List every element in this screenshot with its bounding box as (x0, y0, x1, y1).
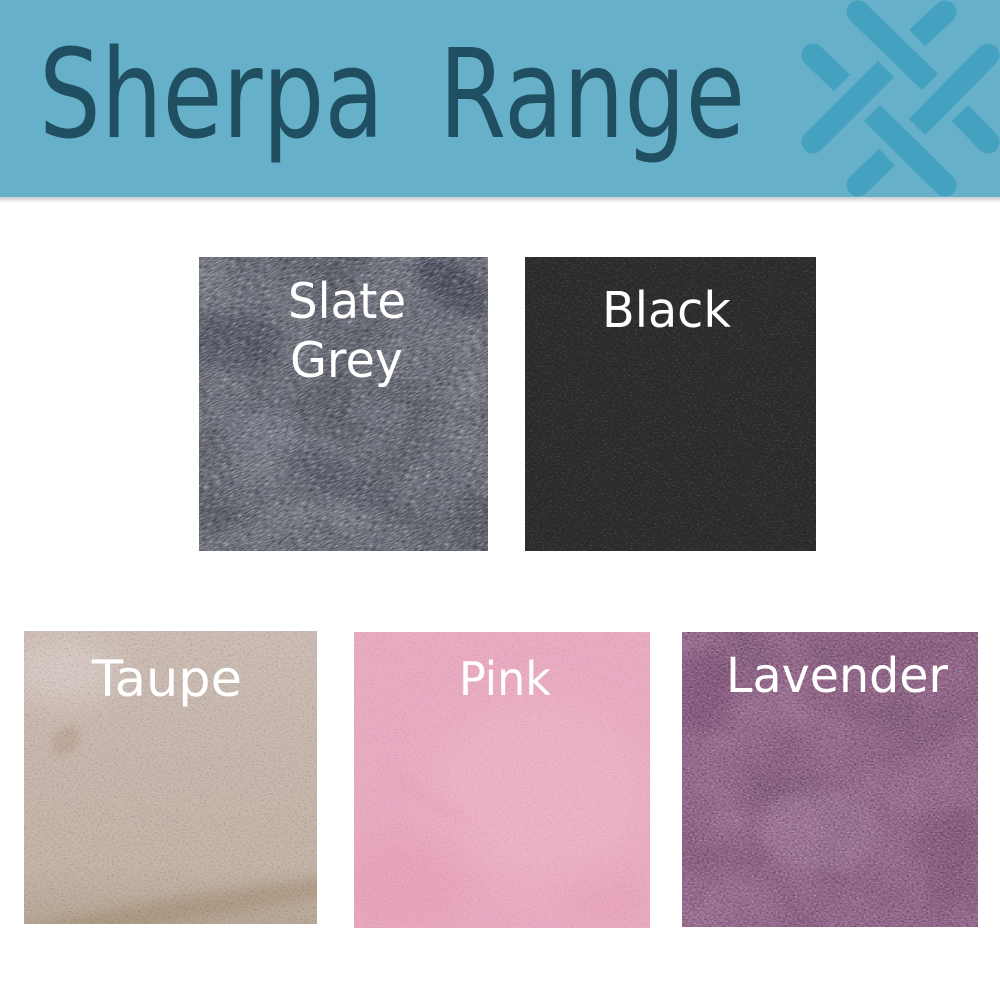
swatch: black (525, 257, 816, 551)
title: Sherpa (39, 24, 384, 167)
label: Slate Grey: Grey (290, 332, 403, 389)
title (39, 24, 745, 167)
swatch: lavender (677, 632, 978, 927)
label: Lavender: Lavender (726, 648, 948, 704)
title: Range (439, 24, 745, 167)
header banner (0, 0, 1000, 203)
label: Slate Grey: Slate (288, 273, 406, 330)
label: Slate Grey (288, 273, 406, 389)
swatch: slate grey (199, 257, 488, 551)
label: Black: Black (602, 282, 732, 339)
swatch: taupe (24, 631, 317, 924)
swatch: pink (354, 632, 650, 928)
label: Pink: Pink (459, 652, 551, 706)
label: Taupe: Taupe (91, 650, 242, 708)
icon: woven cross logo (802, 0, 1000, 196)
